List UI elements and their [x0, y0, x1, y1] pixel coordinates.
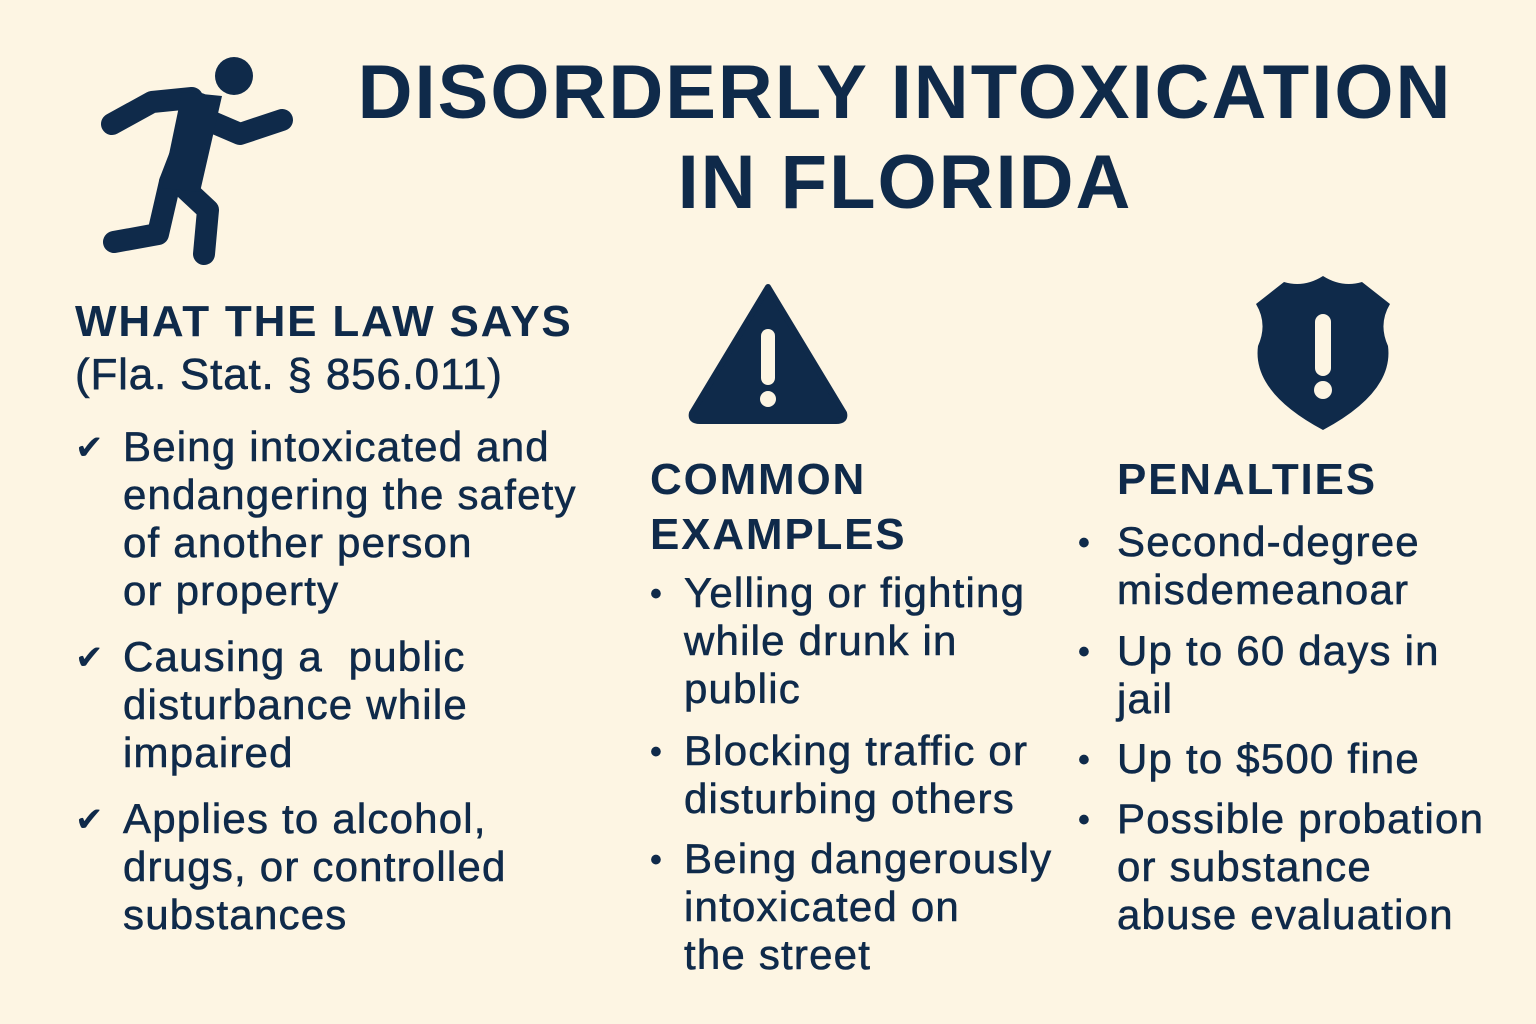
heading: common examples [650, 455, 906, 559]
item: blocking: • [650, 733, 662, 771]
item: jail: • [1078, 633, 1090, 671]
item: disturbance: disturbance while [123, 681, 468, 728]
item: endangering: Being intoxicated and [123, 423, 550, 470]
subheading: statute: (Fla. Stat. § 856.011) [75, 350, 503, 399]
item: probation: • [1078, 801, 1090, 839]
item: fine: Up to $500 fine [1117, 735, 1420, 782]
item: yelling [650, 569, 1025, 712]
item: endangering: or property [123, 567, 339, 614]
item: jail [1078, 627, 1440, 722]
heading: what the law says: WHAT THE LAW SAYS [75, 297, 572, 346]
item: dangerous [650, 835, 1052, 978]
item: blocking: Blocking traffic or [684, 727, 1028, 774]
heading: common examples: COMMON [650, 455, 866, 504]
item: disturbance [75, 633, 468, 776]
item: endangering [75, 423, 577, 614]
item: blocking [650, 727, 1028, 822]
item: dangerous: Being dangerously [684, 835, 1052, 882]
item: probation: Possible probation [1117, 795, 1484, 842]
item: endangering: endangering the safety [123, 471, 577, 518]
item: dangerous: • [650, 841, 662, 879]
item: jail: Up to 60 days in [1117, 627, 1440, 674]
item: fine: • [1078, 741, 1090, 779]
title: IN FLORIDA [678, 140, 1132, 225]
item: disturbance: impaired [123, 729, 294, 776]
panel: common examples [650, 455, 1052, 978]
item: endangering: ✔ [75, 429, 104, 467]
item: misdemeanor: • [1078, 524, 1090, 562]
item: jail: jail [1117, 675, 1173, 722]
item: disturbance: Causing a public [123, 633, 466, 680]
item: yelling: while drunk in [684, 617, 958, 664]
item: misdemeanor: Second-degree [1117, 518, 1420, 565]
item: yelling: public [684, 665, 801, 712]
icon: warning triangle [688, 284, 848, 424]
item: blocking: disturbing others [684, 775, 1015, 822]
heading: common examples: EXAMPLES [650, 510, 906, 559]
item: misdemeanor [1078, 518, 1420, 613]
heading: penalties: PENALTIES [1117, 455, 1377, 504]
item: yelling: • [650, 575, 662, 613]
item: dangerous: intoxicated on [684, 883, 960, 930]
item: disturbance: ✔ [75, 639, 104, 677]
item: yelling: Yelling or fighting [684, 569, 1025, 616]
title [358, 50, 1452, 225]
item: substances [75, 795, 507, 938]
icon: running person [101, 57, 293, 265]
item: probation [1078, 795, 1484, 938]
item: substances: ✔ [75, 801, 104, 839]
item: endangering: of another person [123, 519, 473, 566]
panel: what the law says [75, 297, 577, 938]
item: probation: or substance [1117, 843, 1372, 890]
item: probation: abuse evaluation [1117, 891, 1454, 938]
item: dangerous: the street [684, 931, 871, 978]
item: substances: drugs, or controlled [123, 843, 507, 890]
panel: penalties [1078, 455, 1484, 938]
icon: police badge [1256, 276, 1390, 430]
item: substances: Applies to alcohol, [123, 795, 487, 842]
title: DISORDERLY INTOXICATION [358, 50, 1452, 135]
item: misdemeanor: misdemeanoar [1117, 566, 1409, 613]
item: substances: substances [123, 891, 347, 938]
